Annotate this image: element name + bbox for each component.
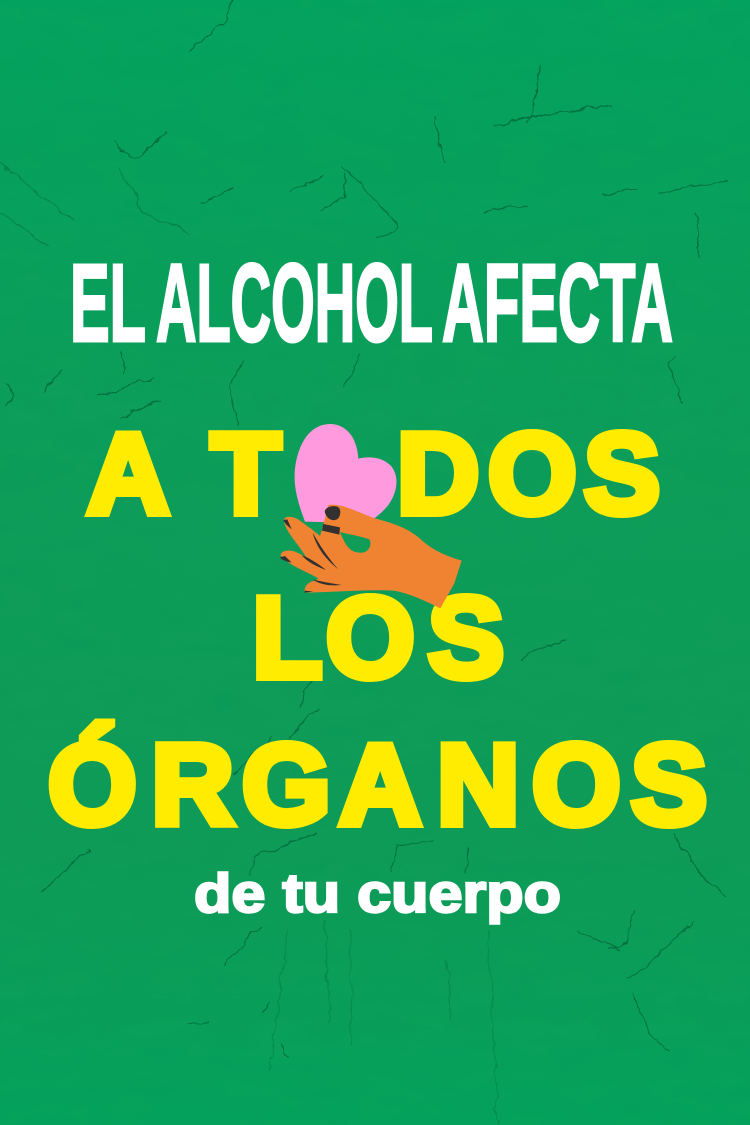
headline: órganos: ÓRGANOS <box>48 722 707 849</box>
icon: orange hand <box>281 505 462 608</box>
icon: hand holding heart <box>280 424 462 608</box>
headline: a todos <box>87 411 660 538</box>
icon: dark nails and finger lines <box>280 506 342 593</box>
headline: a todos: A T <box>87 411 281 538</box>
headline: a todos: DOS <box>397 411 660 538</box>
title: el alcohol afecta: ALCOHOL <box>156 242 433 365</box>
icon: pink heart <box>295 424 396 523</box>
subtitle: de tu cuerpo: de tu cuerpo <box>194 862 561 924</box>
headline: los: LOS <box>252 575 504 702</box>
title: el alcohol afecta: EL <box>70 242 146 365</box>
icon: green gap between thumb and finger <box>340 532 370 553</box>
